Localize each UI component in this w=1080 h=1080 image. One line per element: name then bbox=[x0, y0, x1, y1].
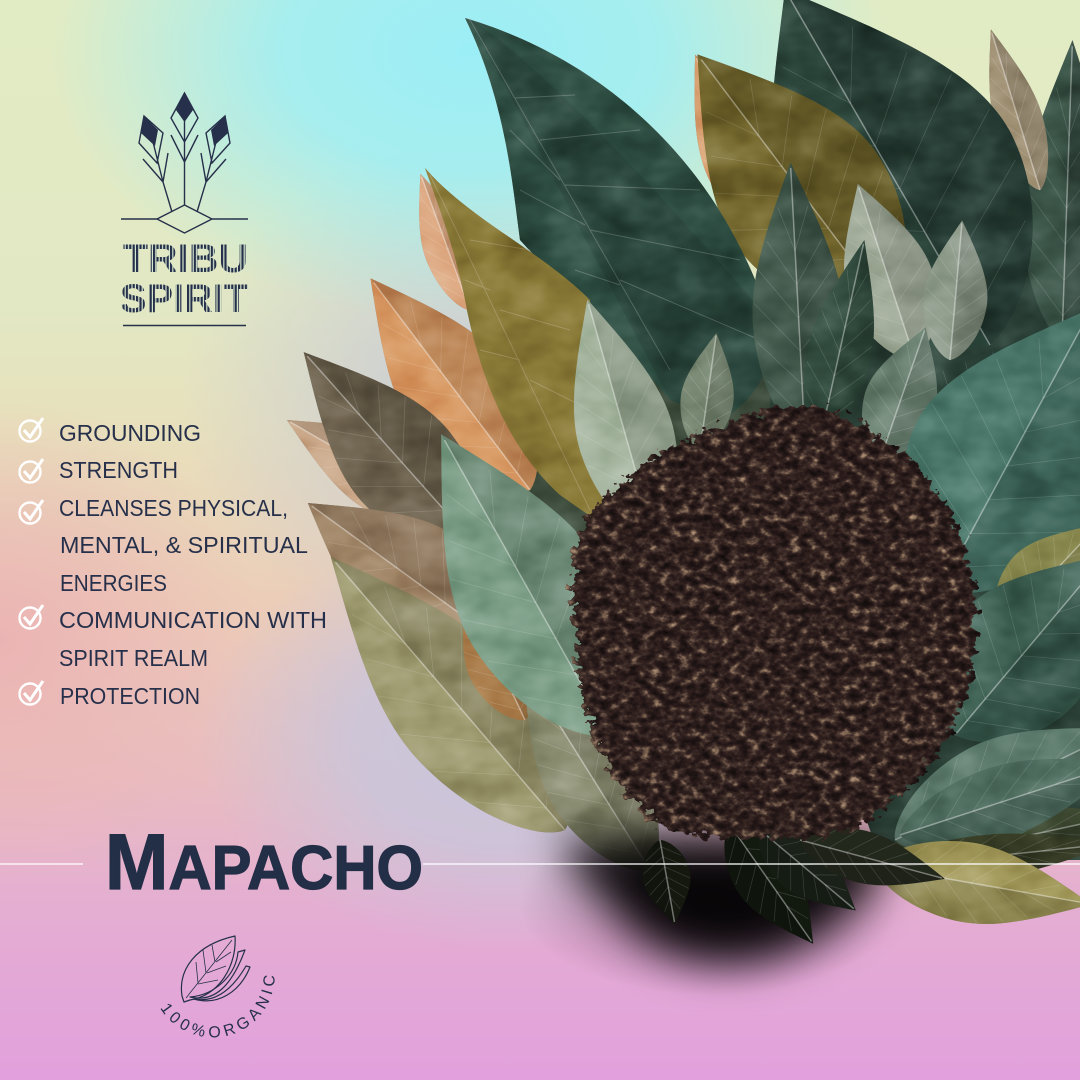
item: grounding: GROUNDING bbox=[59, 420, 201, 446]
logo: Tribu Spirit bbox=[120, 93, 248, 326]
leaf: muted sage lower bbox=[281, 514, 615, 873]
leaf: big dark green bbox=[465, 18, 772, 420]
leaf: pale tan tip bbox=[968, 22, 1063, 197]
leaf: striped lower bbox=[482, 641, 691, 895]
leaf: pale grey small bbox=[918, 218, 994, 363]
leaf: olive right bbox=[971, 497, 1080, 657]
logo underline bbox=[123, 324, 246, 326]
item: protection bbox=[20, 681, 200, 709]
leaf: dark center bbox=[744, 160, 851, 442]
item: cleanses: ENERGIES bbox=[60, 570, 167, 596]
tobacco pile bbox=[572, 405, 977, 839]
leaf: teal right bbox=[852, 261, 1080, 637]
leaf: pale grey bbox=[816, 170, 957, 374]
leaf: dark fan 4 bbox=[636, 836, 698, 928]
shadow under tobacco bbox=[560, 838, 885, 962]
leaf: light green bbox=[375, 397, 676, 772]
leaf: orange lower accent bbox=[437, 580, 554, 734]
leaf: right lower green bbox=[900, 509, 1080, 781]
leaf bouquet bbox=[262, 0, 1080, 944]
item: communication: SPIRIT REALM bbox=[59, 645, 208, 671]
leaf: olive orange bbox=[425, 168, 610, 530]
item: strength: STRENGTH bbox=[59, 457, 178, 483]
leaf: grey green lower bbox=[873, 683, 1080, 885]
leaf: small sage bbox=[674, 329, 743, 454]
leaf: khaki bottom bbox=[868, 827, 1080, 944]
logo wordmark bbox=[120, 237, 248, 321]
logo wordmark: TRIBU bbox=[123, 237, 248, 281]
dark feather fan bbox=[636, 807, 952, 962]
leaf: dark fan 3 bbox=[793, 815, 952, 904]
item: cleanses: MENTAL, & SPIRITUAL bbox=[60, 532, 308, 558]
icon: tobacco leaves bbox=[181, 936, 250, 1002]
leaf: orange olive bbox=[630, 4, 957, 361]
shadow wide halo bbox=[520, 815, 900, 995]
leaf: right dark behind bbox=[861, 303, 1076, 535]
leaf: dark fan 2 bbox=[742, 809, 874, 932]
item: communication bbox=[20, 605, 327, 671]
leaf: top right large dark bbox=[678, 0, 1080, 407]
organic label: 100%ORGANIC bbox=[160, 975, 275, 1038]
item: protection: PROTECTION bbox=[60, 683, 200, 709]
logo wordmark: SPIRIT bbox=[120, 277, 248, 321]
leaf: dark center right bbox=[789, 233, 896, 447]
leaf: dark olive strip bbox=[878, 821, 1080, 890]
item: cleanses bbox=[20, 495, 308, 596]
leaf: peach sliver bbox=[664, 42, 802, 253]
leaf: grey green low bbox=[889, 727, 1080, 869]
horizontal line bbox=[0, 863, 1080, 865]
leaf: peach sliver left bbox=[398, 166, 493, 318]
organic badge bbox=[160, 935, 275, 1038]
leaf: brown back bbox=[262, 315, 522, 587]
backing: dark right foliage mass bbox=[740, 130, 1080, 860]
leaf: far right dark bbox=[1018, 39, 1080, 342]
leaf: tan back bbox=[268, 387, 479, 553]
title: MAPACHO bbox=[105, 817, 423, 906]
leaf: peach back bbox=[326, 245, 575, 524]
item: communication: COMMUNICATION WITH bbox=[59, 607, 327, 633]
leaf: pale sage bbox=[541, 286, 701, 553]
leaf: olive bottom bbox=[862, 777, 1080, 907]
leaf: tan brown bbox=[272, 454, 545, 699]
item: cleanses: CLEANSES PHYSICAL, bbox=[59, 495, 288, 521]
backing: central foliage mass bbox=[520, 290, 770, 620]
leaf: dark fan 1 bbox=[704, 807, 839, 962]
icon: three feathers bbox=[121, 93, 248, 233]
benefits list bbox=[20, 418, 327, 709]
leaf: sage right of center bbox=[846, 316, 960, 472]
